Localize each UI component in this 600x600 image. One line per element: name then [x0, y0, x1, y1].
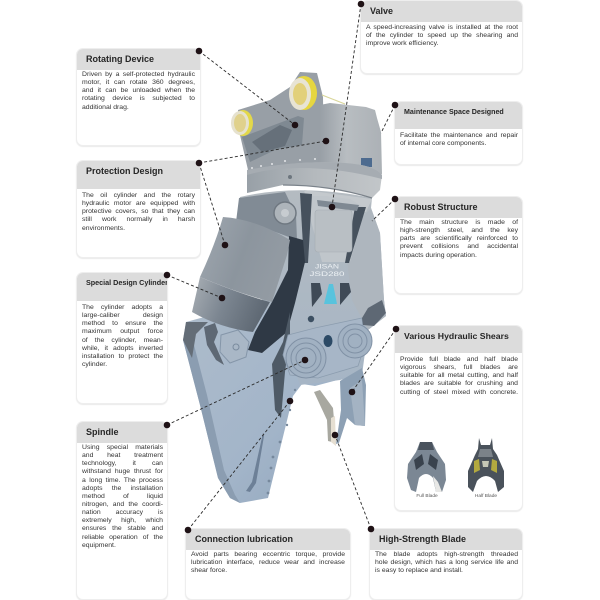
text: Robust Structure: The main structure is made of: [400, 219, 518, 226]
text: Spindle: adopts the installation: [82, 485, 163, 492]
text: Various Hydraulic Shears: suitable for all metal cutting, and half: [400, 372, 518, 379]
upper mount bracket: [238, 72, 324, 170]
text: Spindle: reliable operation of the: [82, 534, 163, 541]
heading: Robust Structure: [395, 197, 522, 218]
text: Special Design Cylinder: large-caliber design: [82, 312, 163, 319]
panel: Rotating Device: [76, 48, 201, 146]
text: Spindle: equipment.: [82, 542, 116, 549]
icon: half blade shear: [468, 438, 504, 492]
text: Rotating Device: additional drag.: [82, 104, 129, 111]
panel: Spindle: [76, 421, 168, 600]
heading: Maintenance Space Designed: [395, 102, 522, 129]
text: Protection Design: The oil cylinder and the rotary: [82, 192, 195, 199]
logo mounts: [311, 283, 351, 307]
heading: Valve: [361, 1, 522, 22]
text: Special Design Cylinder: of the cylinder, mean-: [82, 337, 163, 344]
heading: Protection Design: [77, 161, 200, 189]
jaw slot: [246, 433, 264, 492]
text: Rotating Device: and it can be unloaded when the: [82, 87, 195, 94]
text: Spindle: withstand huge thrust for: [82, 468, 163, 475]
text: Spindle: technology, it can: [82, 460, 163, 467]
heading: Rotating Device: Rotating Device: [86, 54, 154, 64]
text: Robust Structure: high-strength steel, and the key: [400, 227, 518, 234]
text: Special Design Cylinder: while, it adopts inverted: [82, 345, 163, 352]
text: Connection lubrication: Avoid parts bearing eccentric torque, provide: [191, 551, 345, 558]
right hydraulic block: [318, 103, 382, 174]
text: Protection Design: [82, 192, 195, 232]
left blade: [314, 390, 336, 446]
heading: Special Design Cylinder: [77, 273, 167, 301]
text: Connection lubrication: shear force.: [191, 567, 227, 574]
text: Spindle: Using special materials: [82, 444, 163, 451]
text: Maintenance Space Designed: of internal core components.: [400, 140, 486, 147]
text: High-Strength Blade: The blade adopts high-strength threaded: [375, 551, 518, 558]
right blade: [336, 368, 366, 444]
text: Maintenance Space Designed: Facilitate the maintenance and repair: [400, 132, 518, 139]
yellow valve small: [231, 110, 253, 136]
model lettering: JSD280: [310, 272, 346, 278]
text: Spindle: extremely high, which: [82, 517, 163, 524]
heading: High-Strength Blade: [370, 529, 522, 550]
panel: Various Hydraulic Shears: [394, 325, 523, 511]
cylinder lower section: [192, 277, 270, 332]
panel: Connection lubrication: [185, 528, 351, 600]
text: Connection lubrication: [191, 551, 345, 574]
right arm link: [362, 300, 386, 326]
text: Rotating Device: motor, it can rotate 360 degrees,: [82, 79, 195, 86]
text: Special Design Cylinder: The cylinder adopts a: [82, 304, 163, 311]
text: Special Design Cylinder: method to ensure the: [82, 320, 163, 327]
text: Robust Structure: parts are scientifically reinforced to: [400, 235, 518, 242]
label: Half Blade: Half Blade: [475, 494, 497, 499]
text: Rotating Device: [82, 71, 195, 111]
hex link: [204, 323, 249, 365]
text: Protection Design: protective covers, so that they can: [82, 208, 195, 215]
text: Special Design Cylinder: installation to protect the: [82, 353, 163, 360]
text: Connection lubrication: lubrication interface, reduce wear and increase: [191, 559, 345, 566]
text: Spindle: nitrogen, and the coordi-: [82, 501, 163, 508]
heading: Rotating Device: [77, 49, 200, 70]
yellow valve large: [289, 76, 317, 110]
text: Rotating Device: Driven by a self-protected hydraulic: [82, 71, 195, 78]
heading: Special Design Cylinder: Special Design Cylinder: [86, 278, 168, 287]
text: Spindle: nation accuracy is: [82, 509, 163, 516]
text: Spindle: [82, 444, 163, 549]
text: Various Hydraulic Shears: [400, 356, 518, 396]
heading: Protection Design: Protection Design: [86, 166, 163, 176]
text: Special Design Cylinder: maximum output force: [82, 328, 163, 335]
dark rib: [272, 312, 290, 418]
text: Valve: [366, 24, 518, 47]
text: Various Hydraulic Shears: cutting of steel mixed with concrete.: [400, 389, 518, 396]
rotating ring: [247, 162, 382, 198]
panel: Protection Design: [76, 160, 201, 258]
text: Protection Design: environments.: [82, 225, 125, 232]
text: Robust Structure: impacts during operation.: [400, 252, 477, 259]
text: Various Hydraulic Shears: Provide full blade and half blade: [400, 356, 518, 363]
text: Special Design Cylinder: [82, 304, 164, 368]
jaw holes: [267, 389, 296, 494]
text: Spindle: method of liquid: [82, 493, 163, 500]
text: Spindle: and heat treatment: [82, 452, 163, 459]
text: High-Strength Blade: is easy to replace and install.: [375, 567, 463, 574]
cylinder upper cover: [200, 217, 290, 302]
text: Protection Design: still work normally in harsh: [82, 216, 195, 223]
text: Various Hydraulic Shears: vigorous shears, full blades are: [400, 364, 518, 371]
text: Valve: A speed-increasing valve is installed at the root: [366, 24, 518, 31]
heading: Connection lubrication: Connection lubrication: [195, 534, 293, 544]
text: Rotating Device: rotating device is subjected to: [82, 95, 195, 102]
heading: Valve: Valve: [370, 6, 393, 16]
heading: Various Hydraulic Shears: Various Hydraulic Shears: [404, 331, 509, 341]
panel: Maintenance Space Designed: [394, 101, 523, 165]
text: Protection Design: hydraulic motor are equipped with: [82, 200, 195, 207]
model lettering: JISAN: [315, 264, 339, 270]
pivot joint: [236, 192, 297, 240]
panel: Valve: [360, 0, 523, 74]
text: High-Strength Blade: [375, 551, 518, 574]
label: Full Blade: Full Blade: [416, 494, 438, 499]
blue window: [361, 158, 372, 167]
heading: Robust Structure: Robust Structure: [404, 202, 478, 212]
panel: High-Strength Blade: [369, 528, 523, 600]
heading: High-Strength Blade: High-Strength Blade: [379, 534, 466, 544]
text: Special Design Cylinder: cylinder.: [82, 361, 107, 368]
heading: Connection lubrication: [186, 529, 350, 550]
text: Various Hydraulic Shears: blades are suitable for crushing and: [400, 380, 518, 387]
heading: Spindle: Spindle: [86, 427, 119, 437]
text: Robust Structure: [400, 219, 518, 259]
heading: Various Hydraulic Shears: [395, 326, 522, 353]
text: Valve: improve work efficiency.: [366, 40, 438, 47]
hose: [322, 95, 345, 104]
heading: Spindle: [77, 422, 167, 443]
main jaw: [183, 300, 362, 503]
central body: [238, 190, 386, 385]
pivot plate: [283, 316, 372, 378]
text: Spindle: a long time. The process: [82, 477, 163, 484]
dark shadow channel: [248, 236, 305, 353]
heading: Maintenance Space Designed: Maintenance Space Designed: [404, 108, 504, 116]
panel: Robust Structure: [394, 196, 523, 294]
text: Robust Structure: prevent collisions and accidental: [400, 243, 518, 250]
text: Valve: of the cylinder to speed up the shearing and: [366, 32, 518, 39]
model lettering: [310, 264, 346, 278]
text: Maintenance Space Designed: [400, 132, 518, 147]
icon: full blade shear: [407, 442, 446, 492]
panel: Special Design Cylinder: [76, 272, 168, 404]
text: Spindle: ensures the stable and: [82, 525, 163, 532]
text: High-Strength Blade: hole design, which has a long service life and: [375, 559, 518, 566]
